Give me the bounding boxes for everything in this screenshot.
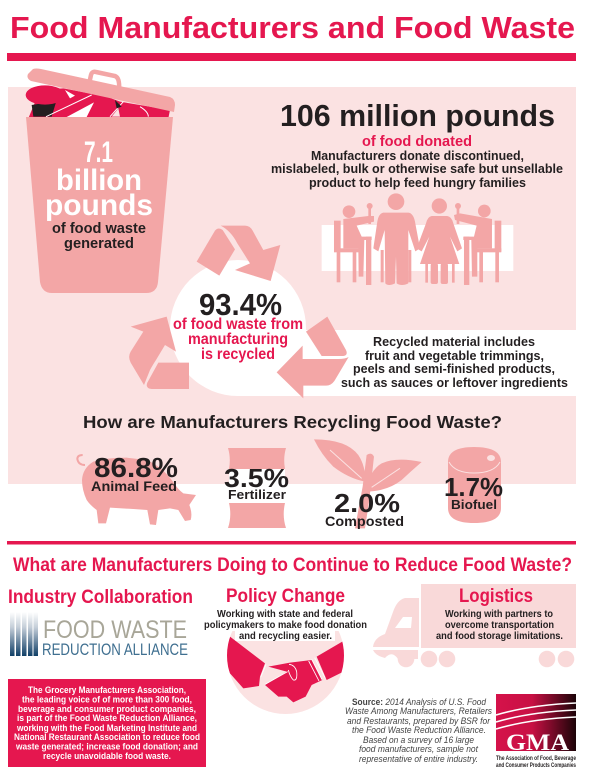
policy text: Working with state and federal — [217, 608, 353, 620]
logo: food waste reduction alliance: REDUCTION ALLIANCE — [42, 641, 188, 659]
icon: recycling arrows — [129, 226, 349, 398]
stat: fertilizer: Fertilizer — [228, 487, 286, 502]
recycled material text — [341, 335, 568, 390]
policy text: policymakers to make food donation — [204, 619, 367, 631]
icon: family at dinner table — [322, 193, 513, 285]
stat: animal feed: 86.8% — [94, 452, 178, 483]
panel: gma statement: The Grocery Manufacturers Association, — [28, 685, 186, 696]
panel: gma statement: working with the Food Marketing Institute and — [16, 723, 197, 734]
panel: gma statement — [8, 679, 206, 767]
bin stat text: 7.1 — [84, 136, 113, 169]
recycled material text: fruit and vegetable trimmings, — [365, 349, 544, 363]
panel: gma statement: is part of the Food Waste Reduction Alliance, — [17, 713, 197, 724]
stat: composted: 2.0% — [334, 488, 400, 518]
truck cab — [373, 598, 419, 647]
title rule — [7, 53, 576, 61]
recycled material text: Recycled material includes — [373, 335, 535, 349]
bin stat text: generated — [64, 236, 134, 252]
title: Food Manufacturers and Food Waste — [10, 11, 575, 45]
stat: composted — [314, 439, 422, 529]
logo: gma — [496, 694, 576, 768]
recycled material text: such as sauces or leftover ingredients — [341, 376, 568, 390]
icon: trash can with food waste — [26, 68, 175, 293]
donated text block — [271, 98, 563, 190]
source note: Source: 2014 Analysis of U.S. Food — [352, 697, 487, 708]
donated text block: 106 million pounds — [280, 98, 555, 133]
logistics text: overcome transportation — [445, 619, 554, 631]
mother — [417, 198, 462, 284]
icon: fertilizer sack — [228, 448, 286, 528]
icon: fuel barrel — [448, 447, 501, 523]
source note: the Food Waste Reduction Alliance. — [352, 725, 486, 736]
policy text: and recycling easier. — [239, 630, 332, 642]
panel: gma statement: the leading voice of of more than 300 food, — [22, 694, 192, 706]
recycled stat text: of food waste from — [173, 316, 303, 333]
heading: how recycling: How are Manufacturers Recycling Food Waste? — [83, 412, 502, 432]
truck trailer — [421, 584, 576, 648]
bin body — [26, 117, 173, 293]
panel: gma statement: beverage and consumer product companies, — [18, 704, 196, 715]
left child and chair — [334, 203, 374, 285]
icon: pig — [77, 455, 196, 525]
bin stat text: billion — [56, 164, 142, 197]
panel: pink background — [8, 87, 576, 484]
food in bin — [26, 85, 170, 118]
source note: and Restaurants, prepared by BSR for — [347, 716, 491, 727]
stat: animal feed — [77, 452, 196, 525]
stat: biofuel — [444, 447, 503, 523]
stat: biofuel: 1.7% — [444, 472, 503, 502]
bin handle — [89, 72, 119, 90]
father — [373, 193, 420, 285]
icon: truck — [373, 584, 576, 667]
recycled material text: peels and semi-finished products, — [353, 362, 555, 376]
stat: composted: Composted — [325, 513, 404, 529]
logo: gma: GMA — [506, 730, 569, 755]
logo: food waste reduction alliance — [10, 612, 188, 659]
right child and chair — [454, 203, 501, 285]
donated text block: product to help feed hungry families — [309, 176, 526, 190]
donated text block: of food donated — [362, 134, 472, 150]
panel: gma statement: National Restaurant Association to reduce food — [14, 732, 200, 743]
stat: biofuel: Biofuel — [451, 497, 497, 512]
bin stat text: of food waste — [52, 221, 146, 237]
source note: food manufacturers, sample not — [359, 744, 478, 755]
logo bars — [10, 612, 38, 656]
stat: fertilizer — [224, 448, 289, 528]
source note — [345, 697, 492, 765]
stat: animal feed: Animal Feed — [91, 478, 177, 494]
logistics text: and food storage limitations. — [436, 630, 563, 642]
panel: gma statement: waste generated; increase food donation; and — [15, 742, 198, 752]
source note: Based on a survey of 16 large — [363, 735, 474, 746]
logistics text — [436, 608, 563, 642]
bin lid — [27, 68, 175, 112]
recycled stat text: is recycled — [201, 346, 275, 363]
source note: representative of entire industry. — [359, 754, 478, 765]
heading: industry collaboration: Industry Collaboration — [8, 586, 193, 608]
icon: plant leaves — [314, 439, 422, 528]
policy text — [204, 608, 367, 642]
recycled stat text: manufacturing — [188, 331, 288, 348]
heading: logistics: Logistics — [459, 585, 533, 607]
source note: Waste Among Manufacturers, Retailers — [345, 706, 492, 717]
recycled stat text: 93.4% — [199, 287, 282, 322]
logistics text: Working with partners to — [445, 608, 553, 620]
heading: policy change: Policy Change — [226, 585, 345, 607]
logo: food waste reduction alliance: FOOD WASTE — [43, 616, 187, 644]
stat: fertilizer: 3.5% — [224, 463, 289, 493]
recycled stat text — [173, 287, 303, 363]
bin stat text — [45, 136, 153, 252]
icon: handshake — [227, 631, 344, 714]
panel: gma statement: recycle unavoidable food waste. — [43, 751, 171, 762]
donated text block: Manufacturers donate discontinued, — [311, 149, 524, 163]
donated text block: mislabeled, bulk or otherwise safe but unsellable — [271, 162, 563, 176]
section rule — [7, 541, 576, 544]
bin stat text: pounds — [45, 189, 153, 222]
